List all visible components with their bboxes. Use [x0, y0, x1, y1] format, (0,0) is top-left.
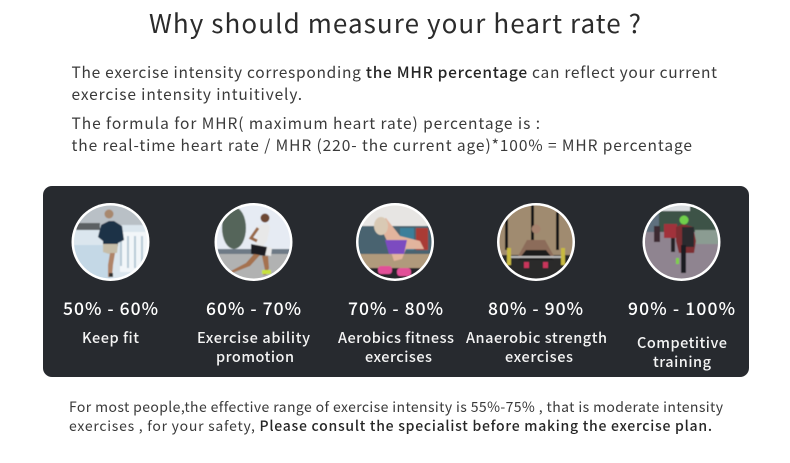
zone: 70% - 80% aerobics fitness exercises	[338, 203, 454, 367]
text block: safety note: exercises , for your safety, Please consult the specialist before making the exercise plan.	[69, 416, 712, 436]
icon: barbell lift photo	[497, 203, 575, 281]
text block: formula	[72, 112, 692, 156]
label: exercises	[505, 346, 573, 367]
title: Why should measure your heart rate ?	[149, 4, 641, 41]
label: training	[653, 351, 712, 372]
label: exercises	[365, 346, 432, 367]
icon: cyclists photo	[642, 203, 722, 282]
icon: dumbbell workout photo	[356, 203, 435, 281]
zone: 80% - 90% anaerobic strength exercises	[466, 203, 607, 367]
percentage: 70% - 80%	[348, 296, 443, 321]
panel: intensity zones	[43, 186, 749, 377]
label: Anaerobic strength	[466, 327, 607, 348]
label	[466, 327, 607, 367]
percentage: 90% - 100%	[628, 296, 735, 321]
label	[197, 327, 310, 367]
label: promotion	[216, 346, 294, 367]
icon: jogger photo	[70, 203, 152, 281]
text block: formula: the real-time heart rate / MHR (220- the current age)*100% = MHR percentage	[72, 134, 692, 156]
percentage: 60% - 70%	[206, 296, 301, 321]
label	[338, 327, 454, 367]
text block: formula: The formula for MHR( maximum heart rate) percentage is :	[72, 112, 540, 134]
percentage: 80% - 90%	[488, 296, 583, 321]
text block: safety note	[69, 397, 724, 436]
percentage: 50% - 60%	[63, 296, 158, 321]
zone: 90% - 100% competitive training	[628, 203, 735, 372]
text block: intro: exercise intensity intuitively.	[72, 83, 302, 105]
zone: 50% - 60% keep fit	[63, 203, 158, 348]
text block: intro: The exercise intensity corresponding the MHR percentage can reflect your current	[72, 61, 717, 83]
label: Aerobics fitness	[338, 327, 454, 348]
label: Exercise ability	[197, 327, 310, 348]
label: Keep fit	[82, 327, 139, 348]
icon: sprinter photo	[214, 203, 294, 281]
zone: 60% - 70% exercise ability promotion	[197, 203, 310, 367]
label: Competitive	[637, 332, 727, 353]
label	[637, 332, 727, 372]
text block: intro	[72, 61, 717, 105]
text block: safety note: For most people,the effective range of exercise intensity is 55%-75% , that is moderate intensity	[69, 397, 724, 417]
